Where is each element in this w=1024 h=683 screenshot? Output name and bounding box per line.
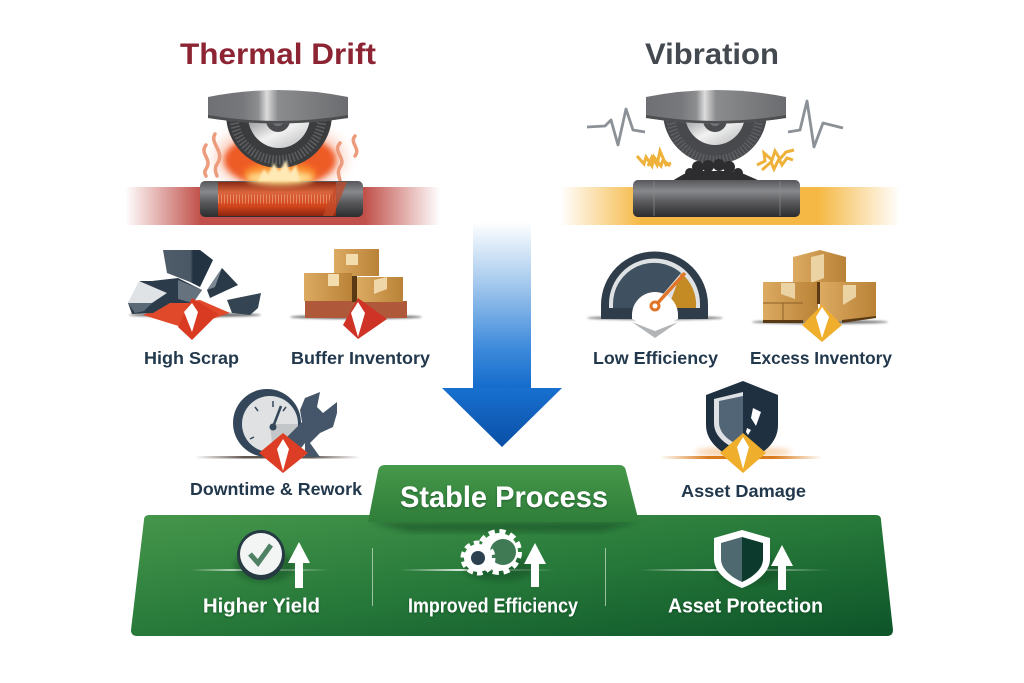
vibration wave left xyxy=(587,109,645,145)
icon: high scrap xyxy=(128,250,261,340)
icon: buffer inventory xyxy=(290,249,422,339)
benefit: higher yield: Higher Yield xyxy=(203,596,320,618)
machine head disc xyxy=(208,90,348,124)
red surface band xyxy=(125,187,440,225)
icon: downtime and rework xyxy=(195,389,360,473)
panel: vibration xyxy=(560,38,900,225)
icon: asset damage shield xyxy=(660,381,822,473)
label: Downtime & Rework: Downtime & Rework xyxy=(190,479,362,499)
green panel body xyxy=(131,515,893,636)
heat flames xyxy=(204,124,357,192)
panel: stable process benefits xyxy=(131,465,893,636)
icon: down arrow xyxy=(442,222,562,447)
grinding wheel xyxy=(663,108,767,164)
heading tab: Stable Process xyxy=(368,465,639,522)
label: Low Efficiency: Low Efficiency xyxy=(593,348,718,368)
glowing roller xyxy=(200,181,363,217)
heading: Thermal Drift: Thermal Drift xyxy=(180,38,376,71)
heading: Vibration: Vibration xyxy=(645,38,779,71)
benefit: improved efficiency xyxy=(400,532,579,618)
heading tab: Stable Process: Stable Process xyxy=(400,481,608,514)
label: Asset Damage: Asset Damage xyxy=(681,481,806,501)
yellow sparks right xyxy=(757,150,794,170)
benefit: asset protection xyxy=(640,530,830,618)
label: High Scrap: High Scrap xyxy=(144,348,239,368)
icon: excess inventory xyxy=(752,250,888,342)
amber surface band xyxy=(560,187,900,225)
benefit: improved efficiency: Improved Efficiency xyxy=(408,596,579,618)
benefit: higher yield xyxy=(190,530,330,618)
tab shadow xyxy=(369,522,639,532)
vibration wave right xyxy=(788,101,843,147)
dividers xyxy=(372,548,606,606)
panel: thermal drift xyxy=(125,38,440,225)
yellow sparks left xyxy=(637,151,671,166)
grinding wheel xyxy=(226,108,332,168)
icon: low efficiency gauge xyxy=(587,251,723,338)
debris xyxy=(672,159,760,181)
steel roller xyxy=(633,180,800,217)
label: Excess Inventory: Excess Inventory xyxy=(750,348,892,368)
machine head disc xyxy=(646,90,786,124)
label: Buffer Inventory: Buffer Inventory xyxy=(291,348,430,368)
benefit: asset protection: Asset Protection xyxy=(668,596,823,618)
sparks xyxy=(246,160,314,185)
